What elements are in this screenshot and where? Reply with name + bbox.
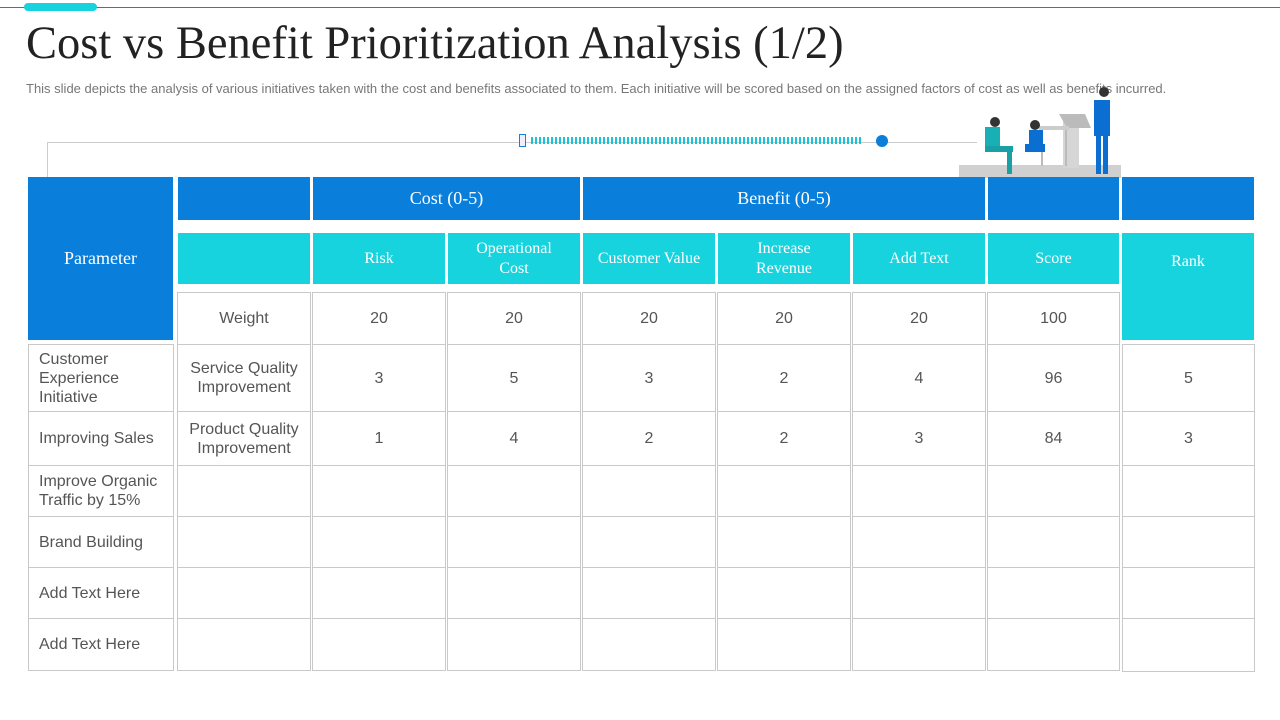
column: risk: 3 — [375, 370, 383, 386]
column: factor: Service Quality — [190, 360, 298, 377]
column: operational cost: 5 — [510, 370, 518, 386]
column: customer value: 2 — [645, 430, 653, 447]
table header row 1 — [28, 177, 173, 340]
text: Customer Value — [598, 250, 700, 266]
parameter column: Customer — [39, 350, 108, 368]
text: Cost — [499, 260, 529, 276]
column: score — [987, 292, 1120, 671]
title: Cost vs Benefit Prioritization Analysis (1/2) — [26, 18, 844, 69]
column: operational cost — [447, 292, 581, 671]
column: rank: 3 — [1184, 430, 1193, 447]
column: increase revenue: 2 — [780, 430, 788, 447]
column: add text — [852, 292, 986, 671]
column: increase revenue: 20 — [775, 310, 793, 327]
column: score: 84 — [1045, 430, 1062, 447]
text: Rank — [1171, 253, 1205, 270]
table header row 2 — [178, 233, 310, 284]
column: risk — [312, 292, 446, 671]
illustration: presenters on stage — [959, 87, 1121, 178]
text: Risk — [364, 250, 394, 266]
parameter column: Add Text Here — [39, 636, 140, 653]
column: risk: 20 — [370, 310, 388, 327]
column: factor: Improvement — [197, 440, 291, 456]
connector line — [47, 142, 977, 177]
text: Benefit (0-5) — [737, 188, 831, 208]
top accent bar — [24, 3, 97, 11]
data grid — [177, 292, 1255, 672]
parameter column: Traffic by 15% — [39, 492, 140, 509]
parameter column: Initiative — [39, 388, 98, 406]
parameter column: Brand Building — [39, 534, 143, 550]
column: factor — [177, 292, 311, 671]
column: customer value: 20 — [640, 310, 658, 327]
subtitle: This slide depicts the analysis of various initiatives taken with the cost and benefits associated to them. Each initiative will be scored based on the assigned factors of cost as well as benefits incurred. — [26, 81, 1166, 96]
column: add text: 3 — [915, 430, 923, 447]
column: add text: 4 — [915, 370, 923, 386]
column: operational cost: 20 — [505, 310, 523, 327]
text: Score — [1035, 250, 1072, 266]
column: score: 96 — [1045, 370, 1062, 386]
slider decoration — [519, 134, 888, 147]
text: Revenue — [756, 260, 812, 276]
parameter column: Improve Organic — [39, 473, 157, 490]
column: increase revenue — [717, 292, 851, 671]
table header row 1: Parameter — [64, 248, 137, 268]
top line — [0, 7, 1280, 8]
column: rank: 5 — [1184, 370, 1193, 386]
column: operational cost: 4 — [510, 430, 518, 447]
parameter column: Improving Sales — [39, 430, 154, 447]
text: Operational — [476, 240, 552, 256]
text: Add Text — [889, 250, 949, 266]
column: customer value: 3 — [645, 370, 653, 386]
column: factor: Improvement — [197, 379, 291, 396]
column: factor: Product Quality — [189, 420, 299, 438]
parameter column — [28, 344, 174, 671]
column: rank — [1122, 344, 1255, 672]
text: Increase — [757, 240, 811, 256]
column: customer value — [582, 292, 716, 671]
parameter column: Add Text Here — [39, 584, 140, 602]
column: factor: Weight — [219, 310, 269, 327]
column: score: 100 — [1040, 310, 1067, 327]
column: increase revenue: 2 — [780, 370, 788, 386]
column: add text: 20 — [910, 310, 928, 327]
column: risk: 1 — [375, 430, 383, 447]
text: Cost (0-5) — [410, 188, 483, 208]
parameter column: Experience — [39, 370, 119, 386]
